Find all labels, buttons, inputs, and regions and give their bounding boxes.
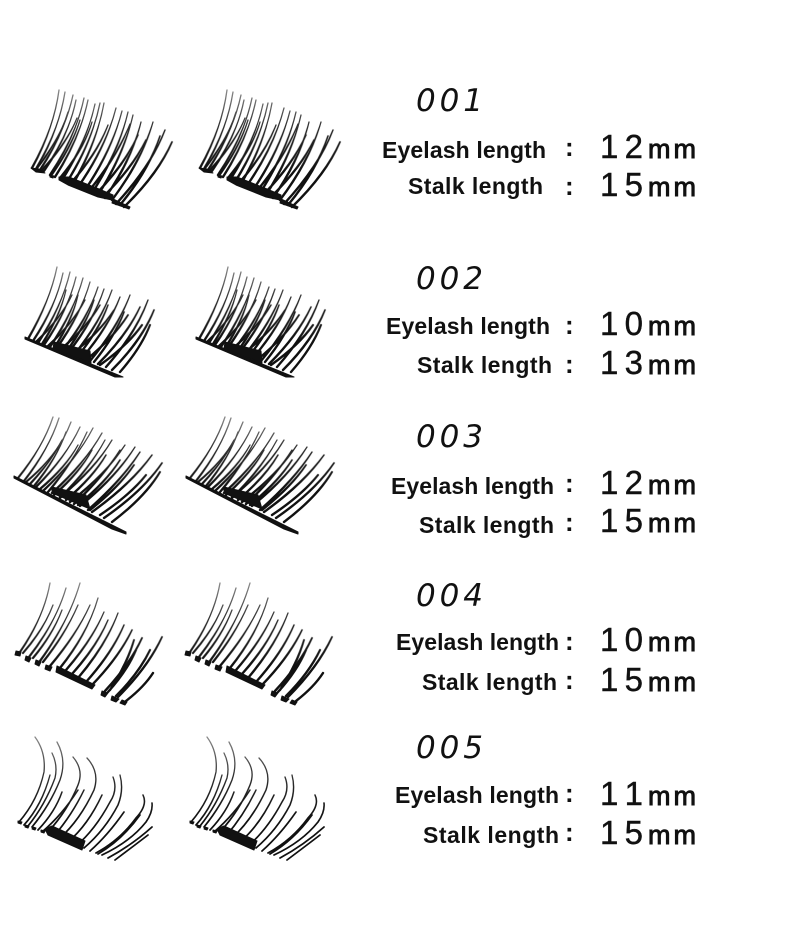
text block: 001 specifications <box>382 83 696 203</box>
text block: 004 specifications: 15 <box>600 661 643 698</box>
text block: 001 specifications: 15 <box>600 166 643 203</box>
panel: 002 lash pair <box>25 267 325 377</box>
text block: 005 specifications: : <box>565 778 574 808</box>
text block: 001 specifications: mm <box>648 172 696 202</box>
text block: 001 specifications: 12 <box>600 128 643 165</box>
text block: 003 specifications: Stalk length <box>419 512 554 538</box>
text block: 004 specifications: 004 <box>416 578 483 614</box>
text block: 005 specifications: 11 <box>600 775 643 812</box>
text block: 003 specifications: mm <box>648 508 696 538</box>
text block: 002 specifications: mm <box>648 311 696 341</box>
text block: 001 specifications: : <box>565 171 574 201</box>
text block: 004 specifications: mm <box>648 627 696 657</box>
text block: 003 specifications: : <box>565 468 574 498</box>
text block: 002 specifications: 002 <box>416 261 483 297</box>
text block: 004 specifications: 10 <box>600 621 643 658</box>
text block: 001 specifications: Eyelash length <box>382 137 546 163</box>
text block: 003 specifications: 003 <box>416 419 483 455</box>
text block: 005 specifications: mm <box>648 820 696 850</box>
text block: 004 specifications: Stalk length <box>422 669 557 695</box>
panel: 005 lash pair <box>18 737 324 860</box>
text block: 002 specifications: : <box>565 310 574 340</box>
text block: 002 specifications: mm <box>648 350 696 380</box>
text block: 002 specifications: 13 <box>600 344 643 381</box>
text block: 005 specifications: Stalk length <box>423 822 559 848</box>
text block: 004 specifications: Eyelash length <box>396 629 559 655</box>
text block: 003 specifications: Eyelash length <box>391 473 554 499</box>
text block: 004 specifications: : <box>565 665 574 695</box>
text block: 001 specifications: Stalk length <box>408 173 543 199</box>
text block: 005 specifications: Eyelash length <box>395 782 559 808</box>
text block: 004 specifications <box>396 578 696 698</box>
text block: 003 specifications: : <box>565 507 574 537</box>
text block: 003 specifications: 15 <box>600 502 643 539</box>
text block: 002 specifications: Stalk length <box>417 352 552 378</box>
panel: 004 lash pair <box>15 583 332 705</box>
text block: 002 specifications: 10 <box>600 305 643 342</box>
text block: 005 specifications: : <box>565 817 574 847</box>
text block: 005 specifications: 15 <box>600 814 643 851</box>
text block: 003 specifications <box>391 419 696 539</box>
text block: 002 specifications: : <box>565 349 574 379</box>
text block: 003 specifications: mm <box>648 470 696 500</box>
text block: 003 specifications: 12 <box>600 464 643 501</box>
text block: 002 specifications: Eyelash length <box>386 313 550 339</box>
text block: 005 specifications: mm <box>648 781 696 811</box>
text block: 001 specifications: mm <box>648 134 696 164</box>
panel: 003 lash pair <box>14 417 334 534</box>
text block: 005 specifications <box>395 730 696 851</box>
text block: 002 specifications <box>386 261 696 381</box>
panel: 001 lash pair <box>31 90 340 209</box>
text block: 004 specifications: mm <box>648 667 696 697</box>
text block: 001 specifications: : <box>565 132 574 162</box>
text block: 004 specifications: : <box>565 626 574 656</box>
text block: 005 specifications: 005 <box>416 730 483 766</box>
text block: 001 specifications: 001 <box>416 83 483 119</box>
